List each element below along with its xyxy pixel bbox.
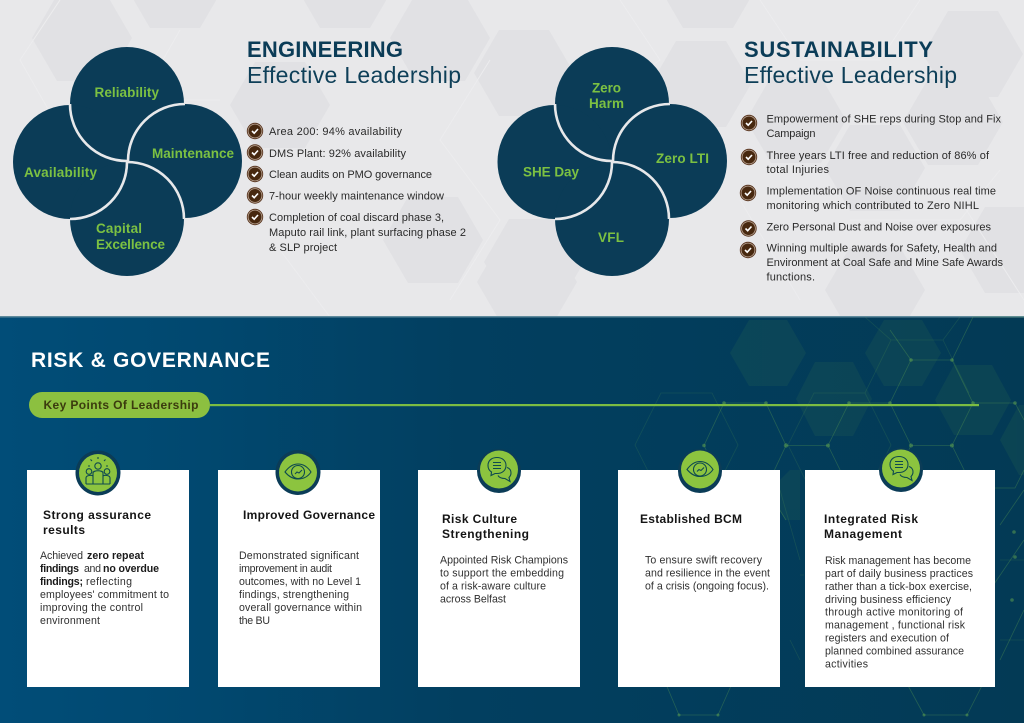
list: sustainability achievements: Environment at Coal Safe and Mine Safe Awards [766, 257, 1004, 269]
list: sustainability achievements: total Injuries [766, 164, 830, 176]
venn diagram: engineering: Reliability [94, 85, 159, 100]
heading: sustainability: SUSTAINABILITY [744, 37, 933, 62]
list: engineering achievements: DMS Plant: 92% availability [269, 148, 406, 160]
heading: engineering: ENGINEERING [247, 37, 403, 62]
card: integrated risk management: registers and execution of [825, 632, 949, 644]
heading: sustainability: Effective Leadership [744, 62, 957, 88]
card: strong assurance results: and [84, 563, 101, 575]
card: strong assurance results: environment [40, 615, 100, 627]
list: sustainability achievements: Implementation OF Noise continuous real time [766, 186, 996, 198]
card: risk culture strengthening: Appointed Risk Champions [440, 554, 568, 566]
card: risk culture strengthening: of a risk-aware culture [440, 580, 546, 592]
list: engineering achievements: Completion of coal discard phase 3, [269, 212, 444, 224]
card: integrated risk management: Integrated Risk [824, 512, 918, 526]
card: risk culture strengthening: Risk Culture [442, 512, 517, 526]
card: established bcm: of a crisis (ongoing focus). [645, 580, 769, 592]
list: sustainability achievements: monitoring which contributed to Zero NIHL [766, 200, 979, 212]
card: risk culture strengthening: to support the embedding [440, 568, 564, 580]
card: established bcm: and resilience in the event [645, 568, 770, 580]
card: integrated risk management: Management [824, 527, 902, 541]
venn diagram: sustainability: Harm [589, 96, 624, 111]
icon: eye [276, 450, 320, 495]
list: engineering achievements: Area 200: 94% availability [269, 126, 402, 138]
venn diagram: engineering: Capital [96, 221, 142, 236]
card: established bcm: To ensure swift recovery [645, 554, 763, 566]
venn diagram: engineering [13, 47, 242, 276]
list: sustainability achievements [740, 114, 1004, 284]
card: strong assurance results: Strong assurance [43, 508, 151, 522]
card: strong assurance results [27, 450, 189, 687]
heading: sustainability [744, 37, 957, 88]
card: improved governance: findings, strengthening [239, 589, 349, 601]
card: integrated risk management: activities [825, 658, 868, 670]
card: integrated risk management: Risk management has become [825, 555, 971, 567]
card: improved governance: outcomes, with no Level 1 [239, 576, 361, 588]
card: strong assurance results: results [43, 523, 85, 537]
card: established bcm [618, 449, 780, 687]
list: sustainability achievements: functions. [766, 272, 815, 284]
card: strong assurance results: findings; [40, 576, 83, 588]
venn diagram: sustainability: Zero [592, 80, 621, 96]
card: strong assurance results: zero repeat [87, 550, 144, 562]
venn diagram: sustainability [498, 47, 727, 276]
card: strong assurance results: reflecting [86, 576, 132, 588]
card: integrated risk management: through active monitoring of [825, 606, 963, 618]
card: improved governance: overall governance within [239, 602, 362, 614]
banner: key points of leadership [29, 392, 979, 418]
list: sustainability achievements: Winning multiple awards for Safety, Health and [766, 242, 997, 254]
card: integrated risk management: driving business efficiency [825, 594, 952, 606]
card: integrated risk management: management , functional risk [825, 620, 966, 632]
card: improved governance [218, 450, 380, 687]
venn diagram: sustainability: VFL [598, 230, 624, 245]
top background [0, 0, 1024, 333]
list: engineering achievements: 7-hour weekly maintenance window [269, 190, 444, 202]
list: engineering achievements [247, 123, 466, 254]
heading: engineering [247, 37, 461, 88]
card: established bcm: Established BCM [640, 512, 742, 526]
venn diagram: engineering: Maintenance [152, 146, 234, 161]
heading: engineering: Effective Leadership [247, 62, 461, 88]
card: improved governance: Improved Governance [243, 508, 375, 522]
card: strong assurance results: no overdue [103, 563, 159, 575]
card: strong assurance results: findings [40, 563, 79, 575]
list: engineering achievements: Maputo rail link, plant surfacing phase 2 [269, 227, 466, 239]
list: engineering achievements: & SLP project [269, 242, 337, 254]
icon: eye [678, 449, 722, 493]
risk and governance background band [0, 316, 1024, 723]
card: strong assurance results: Achieved [40, 550, 83, 562]
banner: key points of leadership: Key Points Of Leadership [44, 398, 198, 412]
venn diagram: engineering: Availability [24, 165, 97, 180]
heading: risk and governance: RISK & GOVERNANCE [31, 349, 270, 372]
icon: chat bubbles [879, 448, 923, 492]
card: integrated risk management [805, 448, 995, 687]
list: sustainability achievements: Three years LTI free and reduction of 86% of [766, 150, 990, 162]
card: improved governance: the BU [239, 615, 270, 627]
venn diagram: sustainability: SHE Day [523, 164, 579, 180]
card: risk culture strengthening: Strengthening [442, 527, 529, 541]
list: engineering achievements: Clean audits on PMO governance [269, 169, 432, 181]
list: sustainability achievements: Campaign [766, 128, 816, 140]
card: integrated risk management: rather than a tick-box exercise, [825, 581, 972, 593]
icon: chat bubbles [477, 449, 521, 493]
card: strong assurance results: improving the control [40, 602, 143, 614]
card: risk culture strengthening [418, 449, 580, 687]
card: risk culture strengthening: across Belfast [440, 594, 506, 606]
venn diagram: sustainability: Zero LTI [656, 151, 709, 166]
list: sustainability achievements: Empowerment of SHE reps during Stop and Fix [766, 114, 1002, 126]
venn diagram: engineering: Excellence [96, 237, 165, 252]
card: improved governance: improvement in audit [239, 563, 332, 575]
card: improved governance: Demonstrated significant [239, 550, 359, 562]
card: integrated risk management: part of daily business practices [825, 568, 973, 580]
card: integrated risk management: planned combined assurance [825, 646, 964, 658]
icon: people [76, 450, 120, 496]
list: sustainability achievements: Zero Personal Dust and Noise over exposures [766, 222, 992, 234]
card: strong assurance results: employees' commitment to [40, 589, 169, 601]
